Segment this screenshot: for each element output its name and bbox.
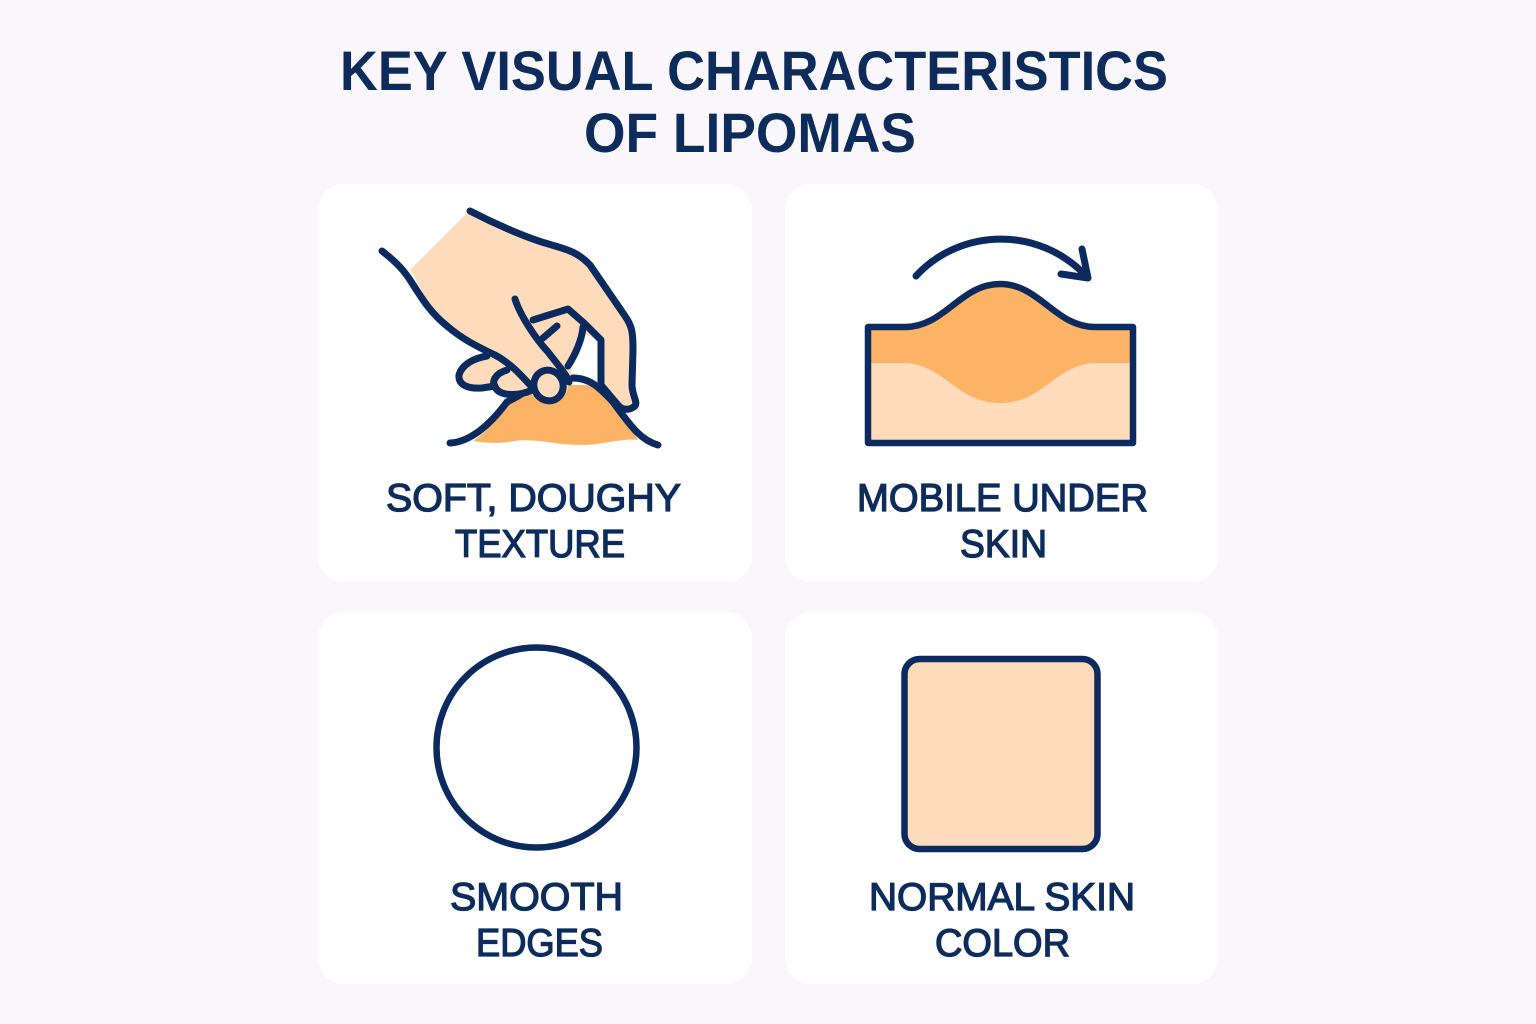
label [857, 477, 1148, 566]
label: MOBILE UNDER [857, 477, 1148, 520]
arrow [916, 239, 1088, 278]
label: SMOOTH [450, 876, 623, 919]
label: NORMAL SKIN [869, 876, 1135, 919]
icon: skin color swatch [904, 659, 1098, 849]
icon: skin cross-section with arrow [868, 239, 1133, 443]
panel: mobile under skin [785, 184, 1218, 582]
title [340, 39, 1168, 164]
label [450, 876, 623, 965]
label [869, 876, 1135, 965]
panel: smooth edges [318, 612, 752, 984]
panel: soft, doughy texture [318, 184, 752, 582]
icon: circle [436, 648, 636, 848]
panel: normal skin color [785, 612, 1218, 984]
label: SKIN [960, 523, 1047, 566]
label: TEXTURE [455, 523, 625, 566]
label [386, 477, 681, 566]
icon: hand pressing a lump [382, 211, 658, 445]
title: KEY VISUAL CHARACTERISTICS [340, 39, 1168, 102]
label: COLOR [935, 922, 1070, 965]
label: SOFT, DOUGHY [386, 477, 681, 520]
title: OF LIPOMAS [584, 101, 916, 164]
label: EDGES [476, 922, 603, 965]
